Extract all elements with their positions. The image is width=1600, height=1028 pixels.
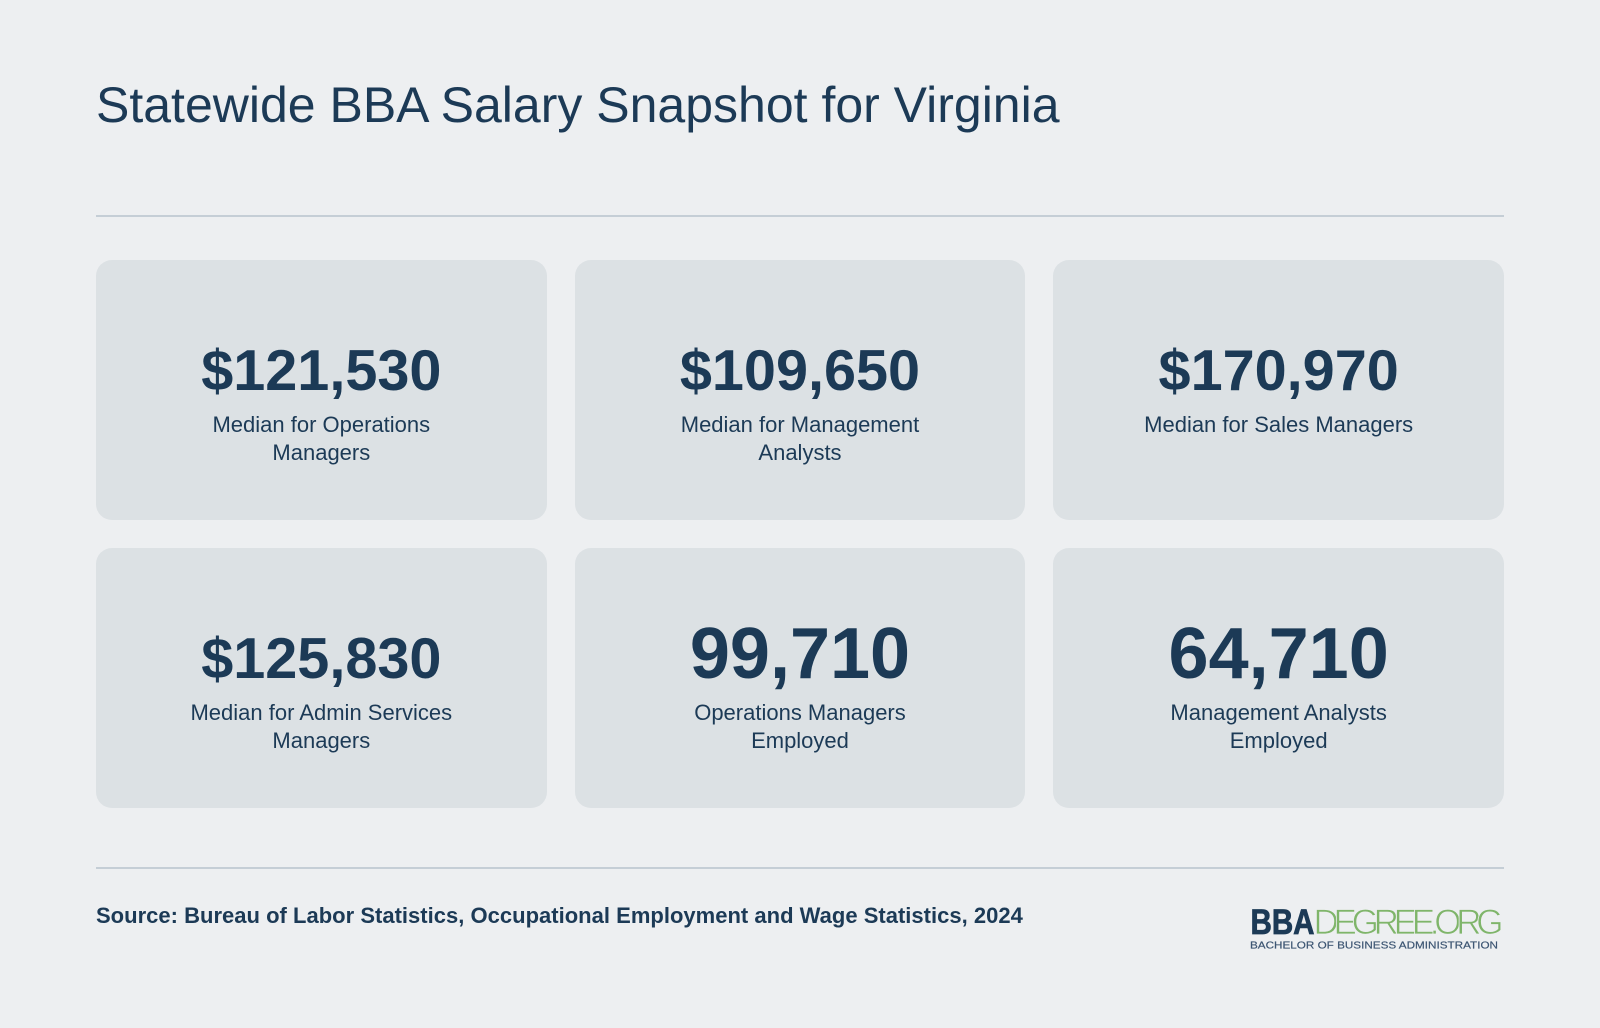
value: sales managers median: $170,970 bbox=[1159, 339, 1399, 403]
label: management analysts employed: Management Analysts bbox=[1170, 700, 1387, 725]
label: operations managers employed: Employed bbox=[751, 728, 849, 753]
label: management analysts employed: Employed bbox=[1230, 728, 1328, 753]
logo: BBADegree.org bbox=[1250, 903, 1504, 952]
value: operations managers employed: 99,710 bbox=[690, 614, 910, 694]
panel: management analysts employed bbox=[1053, 548, 1504, 808]
panel: median for management analysts bbox=[575, 260, 1025, 520]
label: management analysts employed bbox=[1170, 700, 1387, 753]
value: admin services median: $125,830 bbox=[201, 627, 441, 691]
label: operations managers employed: Operations Managers bbox=[694, 700, 906, 725]
panel: operations managers employed bbox=[575, 548, 1025, 808]
panel: median for sales managers bbox=[1053, 260, 1504, 520]
panel: median for operations managers bbox=[96, 260, 547, 520]
logo: BBADegree.org: BBA bbox=[1250, 903, 1314, 942]
label: admin services median: Median for Admin Services bbox=[190, 700, 452, 725]
label: operations median: Managers bbox=[272, 440, 370, 465]
value: management analysts median: $109,650 bbox=[680, 339, 920, 403]
label: operations median bbox=[212, 412, 430, 465]
label: admin services median bbox=[190, 700, 452, 753]
label: operations managers employed bbox=[694, 700, 906, 753]
label: management analysts median bbox=[681, 412, 920, 465]
label: operations median: Median for Operations bbox=[212, 412, 430, 437]
label: management analysts median: Median for Management bbox=[681, 412, 919, 437]
value: operations median: $121,530 bbox=[201, 339, 441, 403]
title: Statewide BBA Salary Snapshot for Virginia bbox=[96, 77, 1060, 133]
source note: Source: Bureau of Labor Statistics, Occupational Employment and Wage Statistics, 2024 bbox=[96, 903, 1023, 928]
panel: median for admin services managers bbox=[96, 548, 547, 808]
label: admin services median: Managers bbox=[272, 728, 370, 753]
logo: BBADegree.org: BACHELOR OF BUSINESS ADMINISTRATION bbox=[1250, 940, 1498, 952]
value: management analysts employed: 64,710 bbox=[1169, 614, 1389, 694]
label: sales managers median: Median for Sales Managers bbox=[1144, 412, 1413, 437]
logo: BBADegree.org: DEGREE.ORG bbox=[1314, 903, 1504, 942]
label: management analysts median: Analysts bbox=[758, 440, 842, 465]
